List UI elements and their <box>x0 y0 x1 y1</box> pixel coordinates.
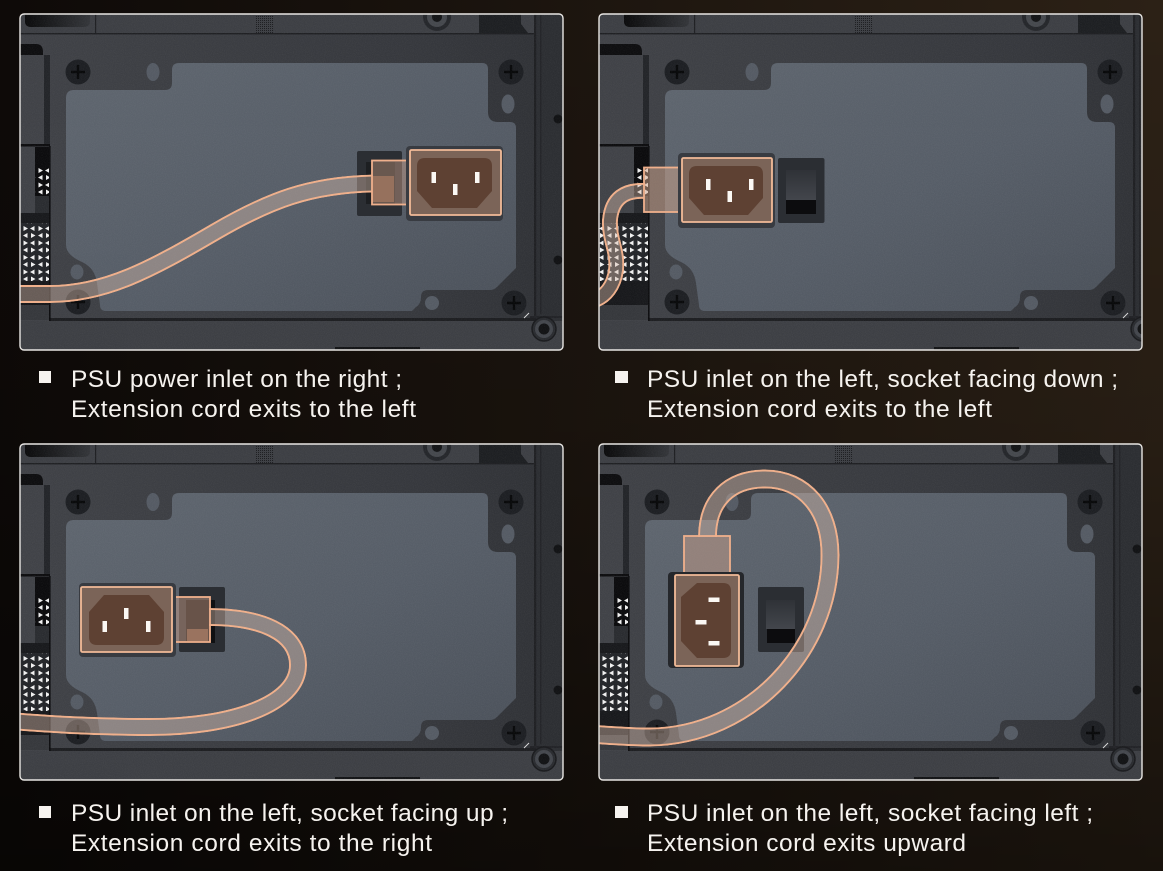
panel border 2 <box>599 14 1142 350</box>
plug <box>172 597 210 642</box>
rocker switch <box>357 151 402 216</box>
plug <box>684 536 730 575</box>
caption 1 <box>39 366 416 423</box>
caption 3: Extension cord exits to the right <box>71 830 432 857</box>
caption 1: PSU power inlet on the right ; <box>71 366 402 393</box>
panel: inlet on the left, socket facing down <box>600 14 1142 350</box>
power socket <box>668 572 744 668</box>
caption 4 <box>615 800 1093 857</box>
caption 3 <box>39 800 508 857</box>
panel border 3 <box>20 444 563 780</box>
PSU chassis <box>20 444 562 780</box>
extension cord <box>10 184 373 294</box>
panel: inlet on the left, socket facing left <box>600 444 1142 780</box>
plug <box>644 168 682 212</box>
PSU chassis <box>20 14 562 350</box>
rocker switch <box>758 587 804 652</box>
power socket <box>406 146 503 221</box>
caption 2 <box>615 366 1118 423</box>
caption 1: Extension cord exits to the left <box>71 396 416 423</box>
caption 3: PSU inlet on the left, socket facing up ; <box>71 800 508 827</box>
rocker switch <box>778 158 824 223</box>
panel: inlet on the left, socket facing up <box>20 444 562 780</box>
caption 4: Extension cord exits upward <box>647 830 966 857</box>
rocker switch <box>179 587 225 652</box>
plug <box>372 160 410 204</box>
caption 4: PSU inlet on the left, socket facing left ; <box>647 800 1093 827</box>
extension cord <box>590 479 830 737</box>
PSU chassis <box>600 14 1142 350</box>
power socket <box>79 583 176 657</box>
panel border 4 <box>599 444 1142 780</box>
extension cord <box>10 617 298 727</box>
caption 2: Extension cord exits to the left <box>647 396 992 423</box>
extension cord <box>592 191 645 301</box>
panel: inlet on the right, cord exits left <box>20 14 562 350</box>
caption 2: PSU inlet on the left, socket facing down ; <box>647 366 1118 393</box>
PSU chassis <box>600 444 1142 780</box>
panel border 1 <box>20 14 563 350</box>
power socket <box>678 153 775 228</box>
